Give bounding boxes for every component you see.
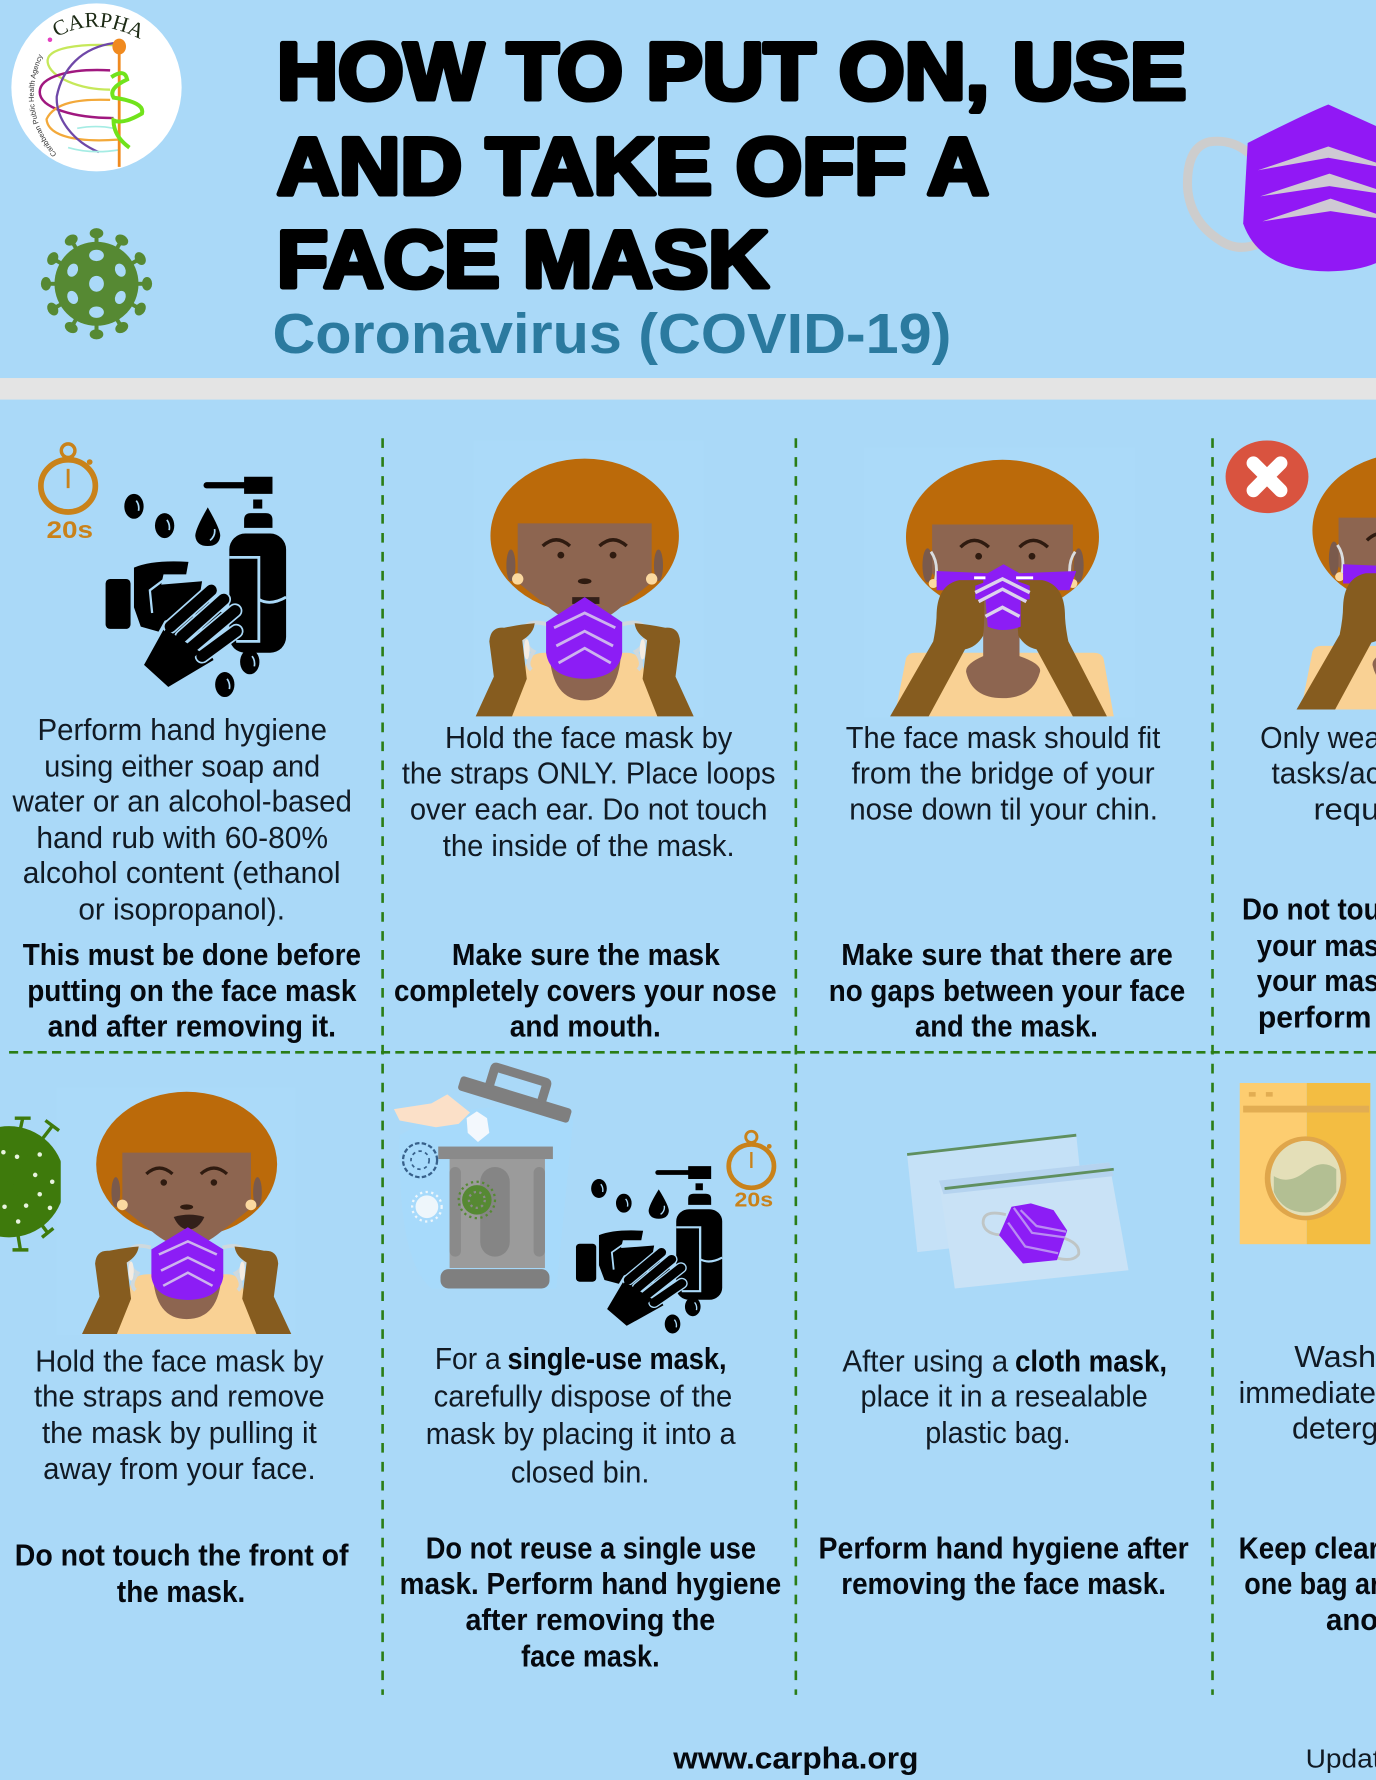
footer: website: www.carpha.org — [672, 1742, 918, 1776]
illustration: bin with hand and viruses — [394, 1054, 579, 1288]
icon: hand washing — [106, 477, 286, 697]
panel: step 5 remove mask — [0, 1092, 349, 1609]
text: step 2 instructions: completely covers your nose — [394, 974, 777, 1008]
text: step 4 instructions — [1242, 721, 1376, 1034]
text: step 3 instructions: no gaps between your face — [829, 974, 1185, 1008]
text: step 3 instructions: and the mask. — [915, 1009, 1098, 1043]
text: step 5 instructions: Do not touch the front of — [15, 1538, 349, 1572]
illustration: resealable plastic bags with mask — [907, 1135, 1129, 1288]
icon: face mask header — [1187, 104, 1376, 271]
text: step 6 instructions — [400, 1342, 781, 1673]
text: step 7 instructions: After using a — [842, 1344, 1009, 1378]
text: step 8 instructions: Wash — [1294, 1340, 1376, 1374]
title: FACE MASK — [277, 215, 769, 305]
footer: updated note: Updat — [1306, 1744, 1376, 1774]
panel: step 4 do not touch — [1226, 440, 1376, 1034]
text: step 2 instructions: over each ear. Do not touch — [410, 793, 767, 827]
text: step 7 instructions: plastic bag. — [925, 1416, 1071, 1450]
icon: red cross — [1226, 440, 1308, 513]
text: step 6 instructions: closed bin. — [511, 1456, 649, 1490]
icon: stopwatch 20s — [729, 1131, 774, 1212]
text: step 5 instructions: Hold the face mask by — [35, 1344, 324, 1378]
text: step 5 instructions: away from your face. — [43, 1452, 316, 1486]
text: step 2 instructions: the inside of the mask. — [443, 829, 735, 863]
text: step 6 instructions: For a — [435, 1342, 502, 1376]
text: step 1 instructions: water or an alcohol-based — [12, 785, 352, 819]
icon: large green virus — [0, 1118, 65, 1250]
text: step 3 instructions — [829, 721, 1185, 1043]
text: step 2 instructions: Make sure the mask — [452, 938, 721, 972]
text: step 6 instructions: single-use mask, — [507, 1342, 727, 1376]
text: step 8 instructions — [1239, 1340, 1376, 1637]
text: step 2 instructions — [394, 721, 777, 1043]
text: step 1 instructions: hand rub with 60-80% — [36, 821, 328, 855]
panel: step 6 dispose single-use mask — [394, 1054, 781, 1673]
dashed grid — [9, 438, 1376, 1695]
text: step 1 instructions: putting on the face mask — [27, 974, 357, 1008]
panel: step 3 fit mask — [829, 460, 1185, 1043]
text: step 2 instructions: the straps ONLY. Place loops — [402, 756, 775, 790]
icon: stopwatch 20s: 20s — [47, 517, 93, 544]
text: step 7 instructions: Perform hand hygiene after — [819, 1532, 1189, 1566]
text: step 1 instructions: and after removing it. — [48, 1009, 336, 1043]
text: step 3 instructions: nose down til your chin. — [849, 793, 1158, 827]
text: step 1 instructions: Perform hand hygiene — [37, 713, 327, 747]
text: step 6 instructions: after removing the — [465, 1603, 715, 1637]
text: step 6 instructions: mask by placing it into a — [426, 1417, 737, 1451]
text: step 4 instructions: requ — [1314, 793, 1376, 827]
text: step 8 instructions: immediate — [1239, 1376, 1376, 1410]
faint image panels — [57, 440, 1135, 1335]
divider band — [0, 378, 1376, 400]
illustration: person fitting mask — [890, 460, 1114, 716]
panel: step 7 cloth mask in bag — [819, 1135, 1189, 1601]
text: step 5 instructions: the mask by pulling it — [42, 1416, 317, 1450]
title — [277, 27, 1186, 305]
text: step 1 instructions: This must be done before — [23, 938, 361, 972]
logo: CARPHA: CARPHA — [54, 12, 140, 39]
text: step 1 instructions — [12, 713, 361, 1043]
logo: CARPHA — [11, 3, 182, 172]
illustration: person touching mask — [1297, 453, 1376, 710]
icon: stopwatch 20s: 20s — [735, 1190, 773, 1212]
text: step 1 instructions: or isopropanol). — [78, 893, 285, 927]
text: step 7 instructions: removing the face mask. — [841, 1567, 1166, 1601]
icon: hand washing — [576, 1166, 722, 1333]
illustration: washing machine — [1240, 1083, 1370, 1244]
text: step 4 instructions: perform — [1258, 1000, 1371, 1034]
text: step 7 instructions — [819, 1344, 1189, 1601]
text: step 2 instructions: Hold the face mask by — [445, 721, 733, 755]
title: AND TAKE OFF A — [277, 122, 989, 212]
text: step 6 instructions: Do not reuse a single use — [426, 1532, 756, 1566]
text: step 7 instructions: place it in a resealable — [861, 1380, 1148, 1414]
logo: CARPHA: Caribbean Public Health Agency — [28, 54, 56, 156]
icon: stopwatch 20s — [41, 444, 95, 544]
icon: coronavirus — [41, 229, 152, 339]
panel: step 2 place mask — [394, 459, 777, 1043]
panel: step 1 hand hygiene — [12, 444, 361, 1043]
text: step 6 instructions: face mask. — [521, 1639, 660, 1673]
illustration: person holding mask by straps — [476, 459, 694, 716]
text: step 6 instructions: carefully dispose of the — [434, 1380, 732, 1414]
text: step 5 instructions: the mask. — [117, 1575, 245, 1609]
illustration: person removing mask — [82, 1092, 291, 1334]
panel: step 8 wash mask — [1239, 1083, 1376, 1637]
text: step 2 instructions: and mouth. — [510, 1009, 661, 1043]
text: step 3 instructions: from the bridge of your — [851, 756, 1155, 790]
text: step 3 instructions: The face mask should fit — [846, 721, 1161, 755]
text: step 1 instructions: alcohol content (ethanol — [23, 856, 341, 890]
title: HOW TO PUT ON, USE — [277, 27, 1186, 117]
text: step 3 instructions: Make sure that there are — [841, 938, 1173, 972]
subtitle: Coronavirus (COVID-19) — [272, 303, 951, 366]
text: step 5 instructions: the straps and remove — [34, 1380, 325, 1414]
text: step 7 instructions: cloth mask, — [1015, 1344, 1167, 1378]
text: step 5 instructions — [15, 1344, 349, 1609]
text: step 6 instructions: mask. Perform hand hygiene — [400, 1567, 781, 1601]
text: step 1 instructions: using either soap and — [44, 749, 320, 783]
